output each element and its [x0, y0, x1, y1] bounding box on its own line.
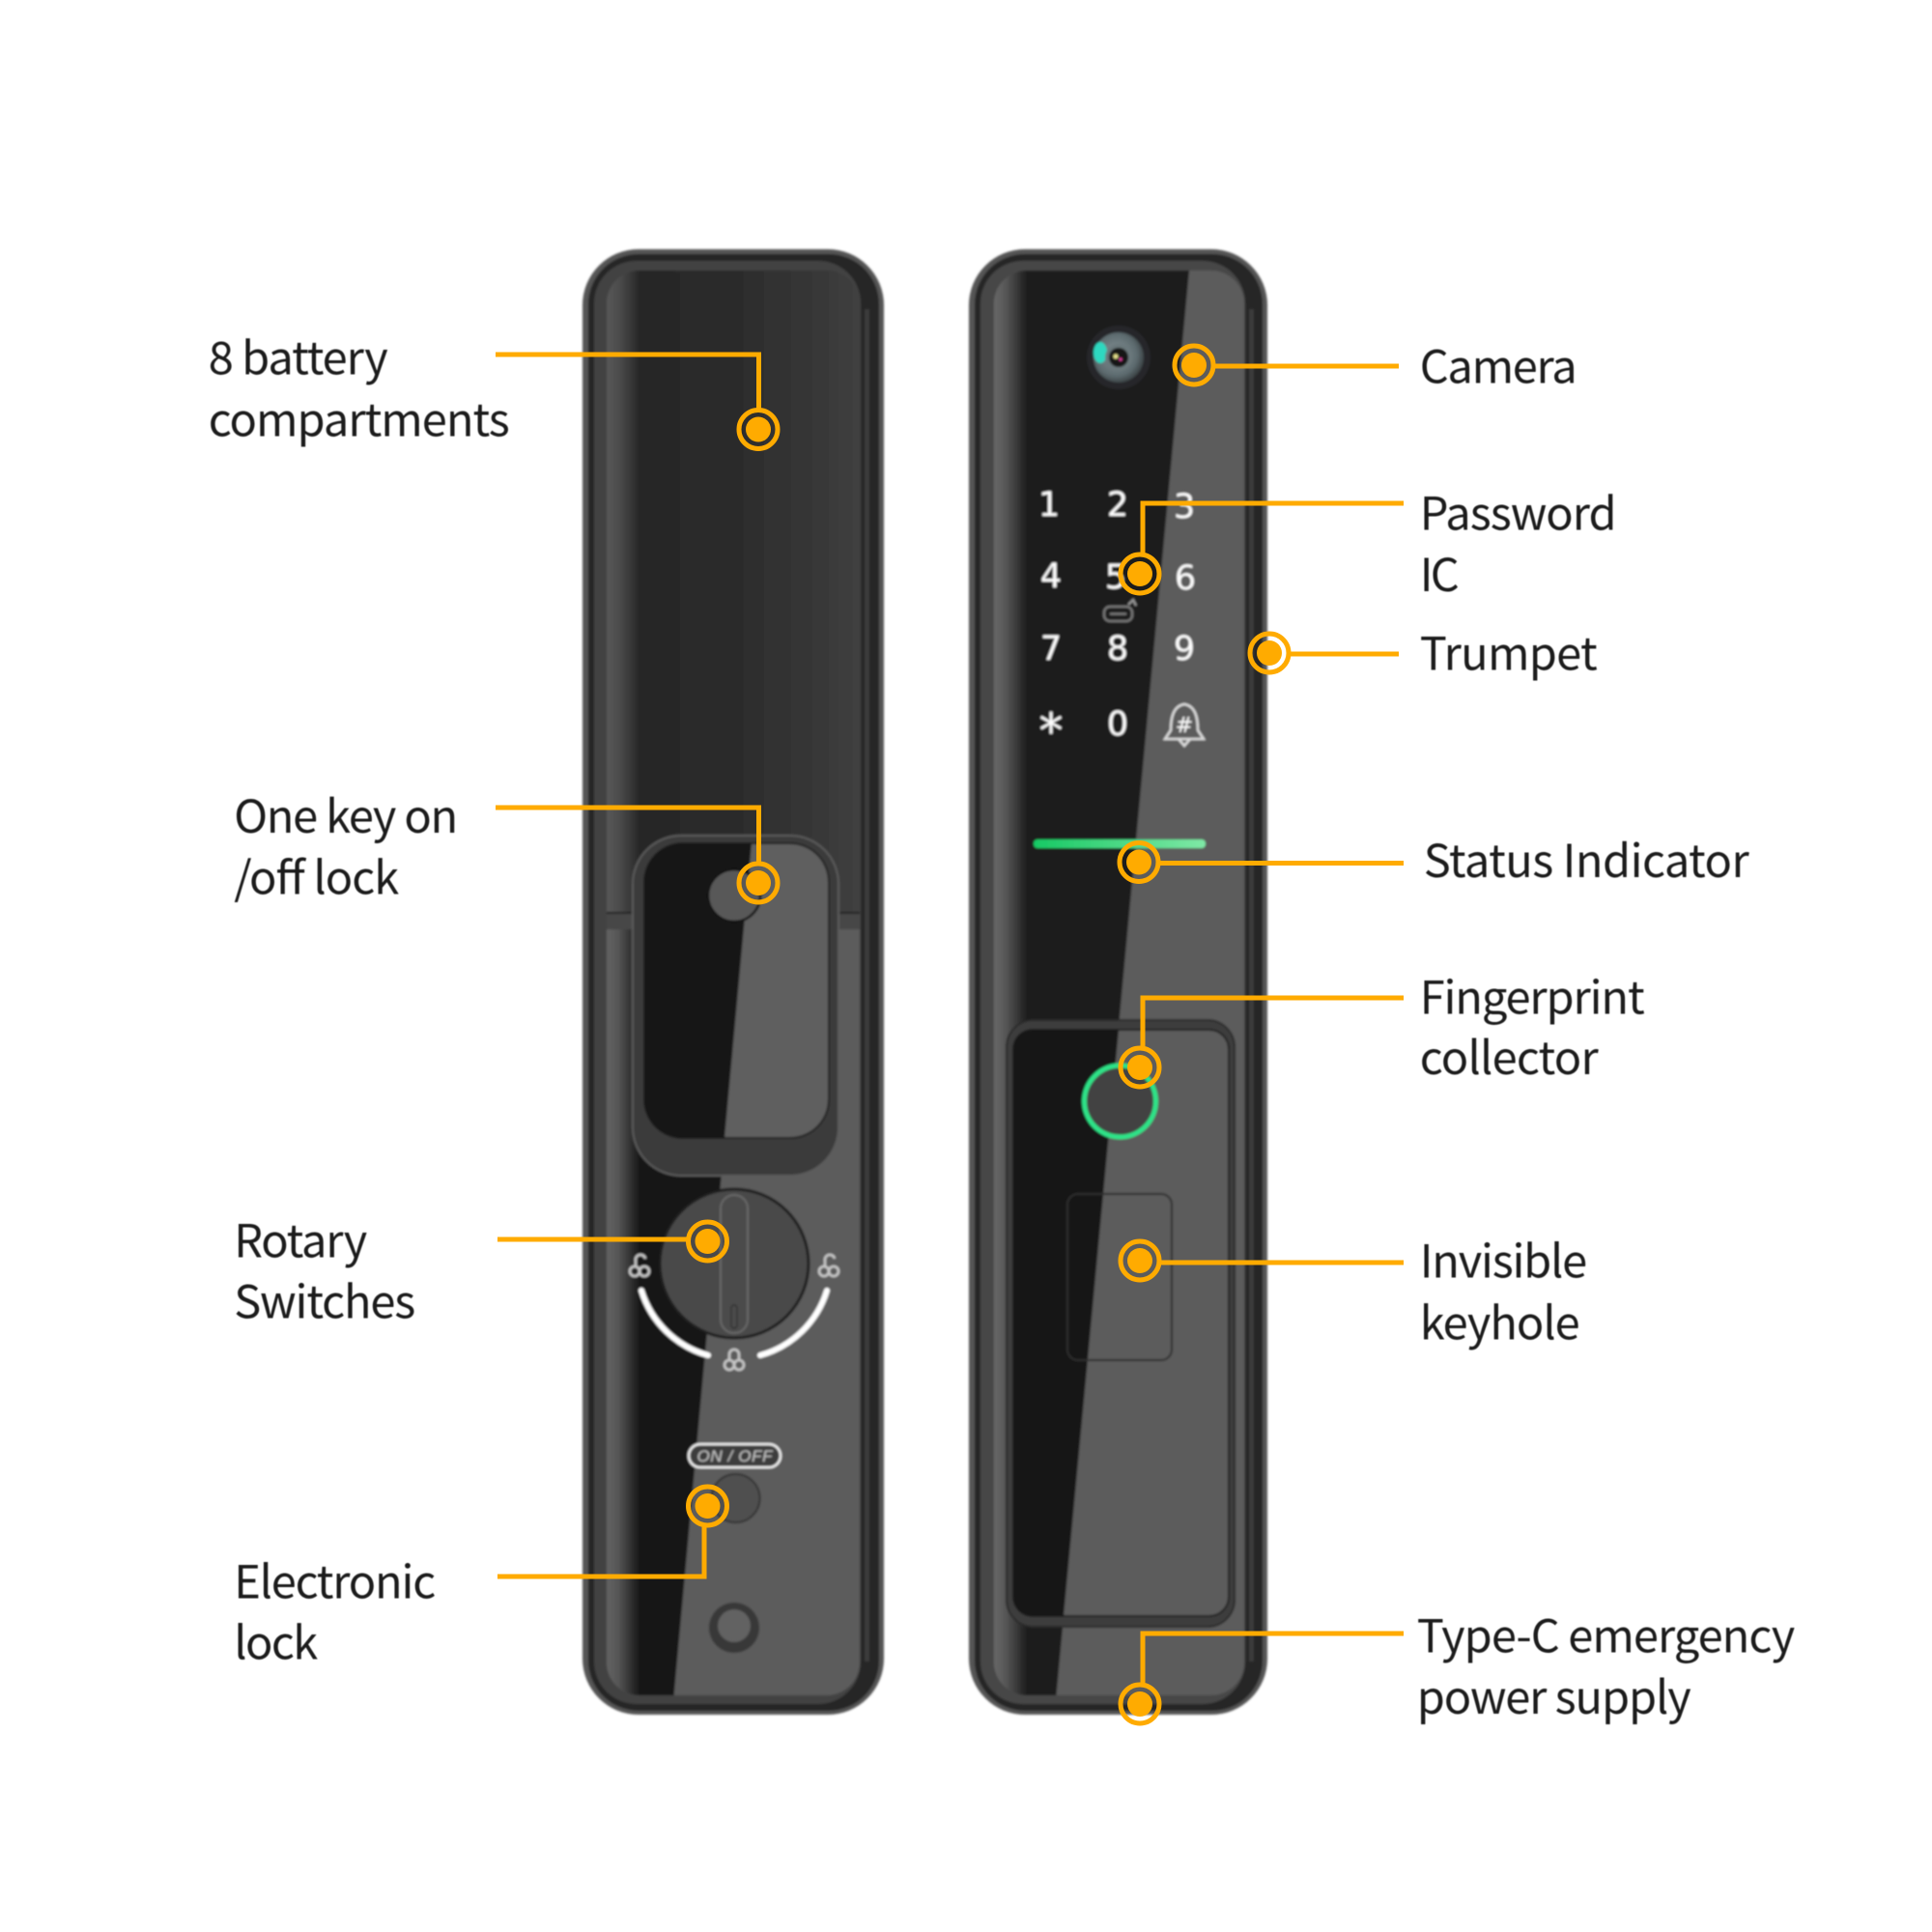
leader line	[1143, 1634, 1404, 1686]
label	[1420, 477, 1617, 605]
on off label	[689, 1444, 781, 1467]
keypad: 7	[1040, 630, 1062, 668]
label: Password	[1420, 477, 1617, 544]
callout: type-c emergency power	[1121, 1600, 1795, 1727]
leader line	[1289, 651, 1399, 657]
marker	[1120, 842, 1158, 881]
battery handle frame	[633, 836, 838, 1176]
icon: low battery indicator	[1104, 600, 1136, 621]
leader line	[496, 808, 759, 865]
label: IC	[1420, 538, 1460, 605]
label: Type-C emergency	[1417, 1600, 1795, 1666]
electronic lock button	[711, 1474, 759, 1522]
marker	[688, 1222, 726, 1261]
label: Switches	[234, 1265, 415, 1332]
leader line	[497, 1236, 688, 1242]
front panel face	[994, 270, 1244, 1700]
label: One key on	[234, 780, 458, 846]
label: collector	[1420, 1021, 1599, 1088]
label: Camera	[1420, 330, 1577, 397]
fingerprint and keyhole panel	[1007, 1020, 1235, 1627]
callout: battery compartments	[209, 322, 778, 450]
invisible keyhole cover	[1067, 1194, 1172, 1360]
leader line	[497, 1525, 704, 1577]
marker	[1121, 554, 1159, 593]
fingerprint sensor	[1084, 1065, 1155, 1137]
label	[234, 1546, 436, 1673]
label: Rotary	[234, 1205, 367, 1271]
label	[234, 1205, 415, 1332]
callout: camera	[1175, 330, 1577, 397]
label	[1417, 1600, 1795, 1727]
label	[209, 322, 510, 450]
infographic: smart lock diagram	[210, 247, 1795, 1725]
label: Electronic	[234, 1546, 436, 1612]
label	[234, 780, 458, 908]
back panel face	[607, 270, 860, 1702]
leader line	[1213, 363, 1399, 369]
leader line	[1159, 1260, 1404, 1265]
keypad: 4	[1040, 557, 1062, 596]
keypad	[1038, 486, 1204, 759]
device: front panel	[969, 249, 1267, 1715]
camera	[1087, 326, 1151, 389]
icon: doorbell hash key: #	[1176, 714, 1193, 738]
keypad: 2	[1107, 486, 1128, 525]
label: lock	[234, 1606, 318, 1673]
label: compartments	[209, 384, 510, 450]
icon: locked	[724, 1350, 744, 1370]
keypad: 0	[1107, 705, 1128, 744]
leader line	[1158, 861, 1404, 866]
keypad: 5	[1105, 558, 1126, 597]
marker	[739, 410, 778, 448]
callout: electronic lock	[234, 1487, 726, 1673]
marker	[1121, 1685, 1159, 1723]
icon: unlocked right	[819, 1255, 838, 1276]
callout: trumpet	[1250, 617, 1598, 684]
label: 8 battery	[209, 322, 388, 388]
keypad: 3	[1174, 488, 1195, 526]
on off label: ON / OFF	[697, 1447, 774, 1465]
callout: password ic	[1121, 477, 1617, 605]
leader line	[1143, 998, 1404, 1049]
callout: fingerprint collector	[1121, 961, 1645, 1088]
keypad: 8	[1107, 630, 1128, 668]
label: /off lock	[234, 841, 399, 908]
marker	[739, 864, 778, 902]
marker	[1121, 1048, 1159, 1087]
back panel body shell	[582, 249, 884, 1715]
callout: rotary switches	[234, 1205, 726, 1332]
device: back panel	[582, 249, 884, 1715]
label	[1420, 1225, 1587, 1353]
marker	[688, 1487, 726, 1525]
leader line	[496, 355, 759, 411]
status indicator light	[1034, 839, 1206, 848]
icon: unlocked left	[630, 1255, 649, 1276]
callout: status indicator	[1120, 824, 1749, 891]
callout: invisible keyhole	[1121, 1225, 1587, 1353]
label: power supply	[1417, 1661, 1691, 1727]
leader line	[1143, 503, 1404, 555]
one key release button	[708, 869, 760, 922]
bottom key cylinder	[709, 1603, 759, 1653]
label: Trumpet	[1420, 617, 1598, 684]
marker	[1121, 1241, 1159, 1280]
marker	[1250, 634, 1289, 672]
label: keyhole	[1420, 1287, 1580, 1353]
front panel body shell	[969, 249, 1267, 1715]
icon: doorbell hash key	[1165, 704, 1204, 746]
keypad: 6	[1175, 559, 1196, 598]
keypad: 9	[1174, 630, 1195, 668]
lock direction arcs	[641, 1291, 827, 1355]
label	[1420, 961, 1645, 1088]
marker	[1175, 346, 1213, 384]
label: Fingerprint	[1420, 961, 1645, 1028]
callout: one key lock	[234, 780, 778, 908]
label: Status Indicator	[1424, 824, 1749, 891]
label: Invisible	[1420, 1225, 1587, 1292]
keypad: 1	[1038, 486, 1060, 525]
keypad: *	[1039, 703, 1063, 759]
rotary knob	[660, 1189, 809, 1338]
